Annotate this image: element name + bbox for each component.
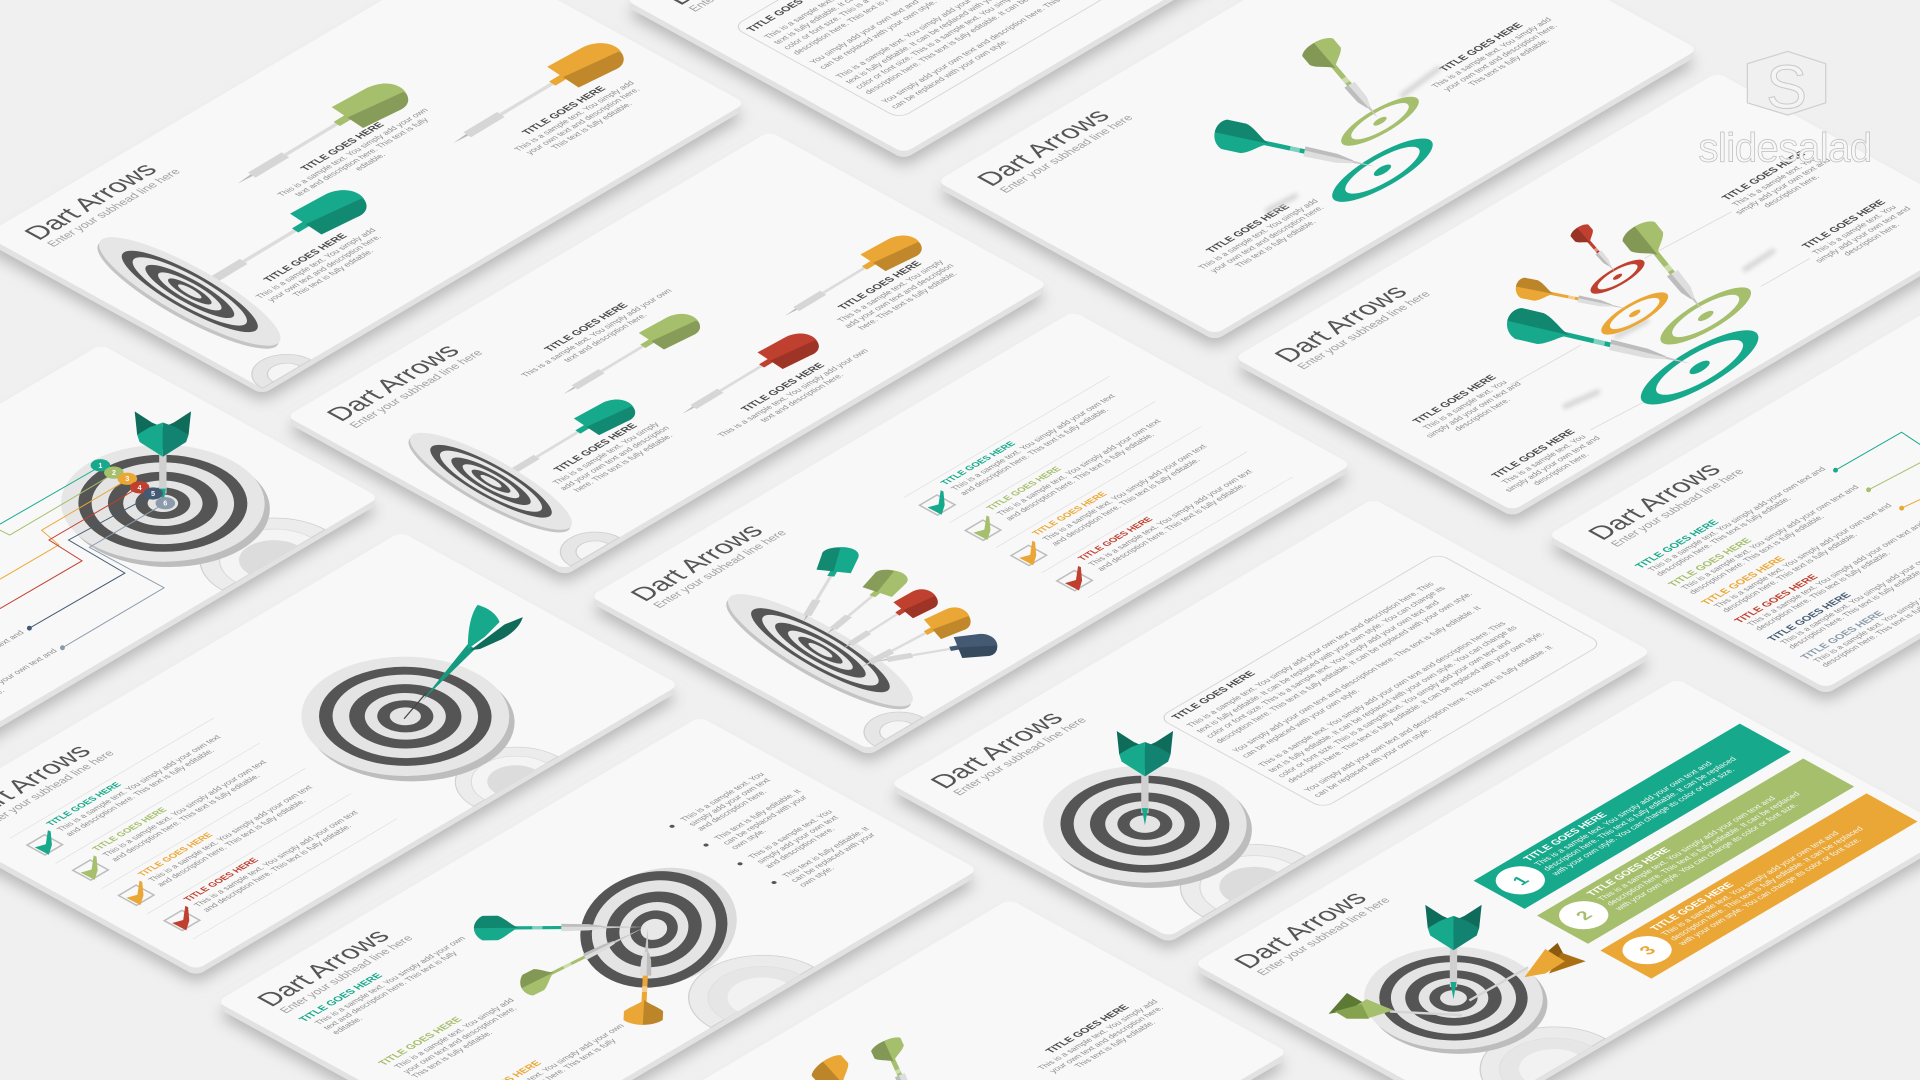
target [86, 220, 292, 366]
dart orange [623, 928, 667, 1025]
dart orange [437, 36, 634, 156]
dart teal [486, 394, 643, 490]
slide content text: TITLE GOES HERE [739, 362, 828, 413]
slide content text: Enter your subhead line here [277, 934, 416, 1015]
dart green [222, 76, 418, 196]
panel: slide lower-left, target with single dart and checklist [0, 532, 679, 983]
slide content text: This is a sample text. You simply add [254, 227, 378, 300]
ring teal [1641, 324, 1758, 411]
slide content text: simply add your own text [755, 814, 841, 865]
slide content text: and description here. This text is fully editable. [1095, 482, 1248, 572]
dart red [833, 584, 944, 659]
slide content text and bars: with your own style. You can change its color or font size. [1676, 837, 1864, 947]
target [17, 421, 314, 591]
panel: slide top-left, three flat darts [0, 0, 745, 402]
slide content text: TITLE GOES HERE [1204, 203, 1293, 255]
slide content text: TITLE GOES HERE [543, 302, 631, 353]
slide content text: text and description here. This text is fully [321, 950, 460, 1031]
slide content text [0, 0, 710, 388]
slide content text: TITLE GOES HERE [1799, 610, 1887, 661]
slide content text: TITLE GOES HERE [1633, 518, 1722, 570]
decorative stand [170, 501, 325, 590]
dart teal [180, 183, 377, 303]
slide content text [305, 155, 1019, 566]
slide content text: TITLE GOES HERE [1733, 573, 1821, 625]
connector lines [1836, 432, 1920, 508]
slide content text: and description here. This text is fully editable. [958, 407, 1111, 497]
dart teal [1117, 731, 1173, 825]
target [1325, 925, 1586, 1075]
slide content text: TITLE GOES HERE [1170, 670, 1259, 722]
slide content text: You simply add your own text and description here. This text is fully editable. It [1302, 644, 1555, 793]
dart red [1568, 222, 1624, 278]
slide content text: TITLE GOES HERE [984, 465, 1063, 512]
slide content text: and description here. [763, 826, 837, 869]
slide content text: This is a sample text. You simply add your own text and [1679, 484, 1861, 591]
slide content text: Dart Arrows [1268, 281, 1414, 366]
slide content text: editable. [353, 152, 388, 172]
slide content text: TITLE GOES HERE [377, 1016, 465, 1067]
slide content text: description here. This text is fully editable. [1720, 532, 1859, 614]
dart red [669, 327, 827, 424]
numbered circles: 2 [112, 468, 116, 477]
slide content text: TITLE GOES HERE [1800, 198, 1889, 250]
slide content text: TITLE GOES HERE [1490, 428, 1578, 480]
slide content text [1575, 428, 1920, 670]
slide content text: TITLE GOES HERE [297, 972, 386, 1024]
slide content text: your own text and description here. [1047, 1005, 1166, 1074]
slide content text: and description here. This text is fully editable. [109, 773, 262, 863]
panel: slide left, target with numbered lines [0, 344, 379, 796]
slide content text: This is a sample text. You simply add [1430, 16, 1554, 89]
slide content text: description here. [1452, 397, 1513, 432]
slide content text: This text is fully editable. It [712, 788, 804, 842]
slide content text: own style. [797, 865, 836, 888]
watermark logo [1698, 51, 1872, 171]
slide content text: and description here. This text is fully editable. [201, 823, 354, 913]
slide content text: description here. This text is fully editable. [1753, 550, 1892, 632]
panel: slide lower-right, three numbered bars [1194, 679, 1920, 1080]
dart shadows [1565, 251, 1773, 407]
dart orange [772, 229, 930, 326]
dart navy [872, 631, 1001, 674]
slide content text: This is a sample text. You [1730, 156, 1819, 208]
slide content text [0, 610, 558, 957]
slide content text: description here. This text is fully editable. It can be replaced with your own style. [1285, 630, 1547, 784]
slide content text: description here. This text is fully editable. It can be replaced with your own style. [1214, 591, 1475, 745]
slide content text: can be replaced with your [721, 794, 809, 846]
leader lines [1511, 212, 1810, 430]
check marks [928, 490, 1082, 590]
connector nodes [1833, 468, 1904, 511]
slide content text: This is a sample text. You simply add your own text and description here. This [1185, 581, 1436, 729]
target [256, 632, 560, 806]
numbered circles: 6 [163, 499, 167, 508]
slide content text: Dart Arrows [924, 707, 1070, 792]
slide content text: This is a sample text. You simply add your own text [949, 393, 1118, 492]
ring green [1660, 283, 1751, 349]
slide content text: description here. [1761, 174, 1822, 209]
slide content text: This is a sample text. You simply add your own text [995, 418, 1164, 517]
dart orange [852, 602, 977, 679]
slide content text: add your own text and description [842, 262, 956, 329]
dart orange [1514, 276, 1629, 319]
slide content text: This text is fully editable. [1466, 37, 1552, 87]
dart teal [1212, 118, 1378, 181]
slide content text: This text is fully editable. [1233, 219, 1318, 269]
slide content text: Enter your subhead line here [997, 113, 1136, 195]
slide content text: You simply add your own text and description here. This text is fully editable. It [1230, 605, 1484, 754]
slide content text: This text is fully editable. [549, 101, 634, 151]
ring orange [1601, 289, 1668, 338]
slide content text: Enter your subhead line here [1295, 289, 1434, 371]
slide content text: TITLE GOES HERE [1044, 1003, 1132, 1055]
slide content text and bars: Enter your subhead line here [1254, 896, 1393, 977]
slide content text: description here. This text is fully editable. [1654, 495, 1793, 577]
slide content text: Enter your subhead line here [347, 348, 486, 430]
slide content text: Dart Arrows [18, 159, 164, 244]
slide content text and bars: 1 [1508, 873, 1534, 888]
slide content text and bars: with your own style. You can change its color or font size. [1549, 767, 1737, 877]
slide content text: This is a sample text. You simply add [512, 80, 637, 153]
slide content text: This is a sample text. You simply add your own text [146, 784, 315, 883]
slide content text: This text is fully editable. It [780, 825, 872, 879]
slide content text: This is a sample text. You simply add your own text [1041, 443, 1209, 542]
slide content text: TITLE GOES HERE [1720, 150, 1809, 202]
slide content text: TITLE GOES HERE [1766, 591, 1854, 643]
slide content text: and description here. This text is fully editable. [1004, 432, 1157, 522]
slide content text and bars: description here. This text is fully editable. It can be replaced [1668, 825, 1866, 942]
slide content text: simply add your own text [687, 777, 773, 827]
slide content text: Enter your subhead line here [950, 716, 1090, 797]
target [569, 854, 748, 1001]
slide content text: This is a sample text. You simply add your own [276, 107, 431, 198]
target [399, 417, 582, 548]
dart teal [782, 545, 865, 624]
target [999, 741, 1296, 912]
slide content text: TITLE GOES HERE [1030, 490, 1109, 537]
slide content text: Dart Arrows [320, 340, 466, 425]
numbered circles: 3 [125, 474, 129, 483]
slide content text: TITLE GOES HERE [938, 440, 1018, 486]
dart green [551, 308, 708, 404]
slide content text: This is a sample text. You simply add your own text [101, 759, 269, 858]
connector nodes [27, 626, 65, 650]
slide content text: description here. [1531, 451, 1591, 487]
slide content text: can be replaced with your own style. [817, 0, 939, 71]
slide content text: can be replaced with your own style. [1312, 727, 1434, 799]
slide content text: text and description here. [562, 312, 649, 363]
target [715, 577, 924, 726]
slide content text: and description here. This text is fully editable. [63, 748, 217, 838]
slide content text and bars: TITLE GOES HERE [1522, 811, 1610, 863]
slide content text [970, 0, 1610, 298]
slide content text: your own text and description here. [524, 86, 642, 156]
ring green [1341, 93, 1419, 150]
slide content text and bars: TITLE GOES HERE [1649, 881, 1737, 933]
slide content text: and description here. This text is fully editable. [1049, 457, 1202, 547]
slide content text: own style. [729, 828, 768, 851]
panel: slide top, two darts on rings [937, 0, 1698, 348]
slide content text: Enter your subhead line here [44, 167, 184, 249]
slide content text: and description here. This text is fully editable. [155, 798, 308, 888]
dart orange [808, 1051, 896, 1080]
slide content text: TITLE GOES HERE [44, 781, 123, 827]
slide content text and bars [1227, 691, 1920, 1080]
slide content text: This is a sample text. You simply add your own text and description here. This [1257, 620, 1508, 768]
panel: slide right, four darts on rings [1234, 72, 1920, 524]
ring teal [1332, 133, 1433, 207]
slide content text: TITLE GOES HERE [1411, 374, 1500, 425]
slide content text: TITLE GOES HERE [1700, 555, 1788, 607]
slide content text: here. This text is fully editable. [856, 270, 959, 331]
slide content text: text is fully editable. It can be replaced with your own style. You can change its [1194, 585, 1447, 734]
slide content text and bars: description here. This text is fully editable. It can be replaced [1605, 790, 1802, 907]
slide content text: This is a sample text. You [1500, 433, 1588, 485]
dart teal [1504, 305, 1694, 379]
ring red [1591, 257, 1645, 297]
slide content text [924, 515, 1635, 924]
slide content text: TITLE GOES HERE [181, 856, 261, 903]
dart teal [474, 915, 645, 940]
slide content text [609, 341, 1312, 746]
slide content text: TITLE GOES HERE [299, 121, 387, 173]
slide content text: simply add your own text and [1503, 435, 1603, 493]
slide content text: can be replaced with your [789, 831, 878, 884]
panel: slide lower-centre, target and text box [890, 499, 1651, 950]
dart orange [1469, 943, 1586, 1000]
slide content text: This text is fully editable. [1073, 1019, 1158, 1069]
slide content text and bars: description here. This text is fully editable. It can be replaced [1541, 756, 1739, 872]
slide content text: TITLE GOES HERE [552, 422, 640, 474]
panel: slide bottom-left, three darts on large target [217, 717, 978, 1080]
dart green [869, 1034, 927, 1080]
slide content text: color or font size. This is a sample text. You simply add your own text and [1204, 599, 1442, 739]
slide content text: TITLE GOES HERE [1438, 21, 1526, 73]
numbered circles: 5 [151, 489, 155, 498]
slide content text: This is a sample text. You simply add your own text [192, 809, 361, 908]
numbered circles: 1 [98, 461, 102, 470]
slide content text: your own text and description here. [1208, 204, 1326, 274]
slide content text: TITLE GOES HERE [1667, 537, 1755, 589]
slide content text [250, 733, 962, 1080]
connector lines [0, 468, 164, 648]
slide content text: This is a sample text. You simply add your own text and [1646, 466, 1828, 573]
slide content text: TITLE GOES HERE [1076, 516, 1155, 562]
slide content text: color or font size. This is a sample text. You simply add your own text and [1276, 639, 1514, 779]
body text [0, 629, 68, 770]
slide content text and bars: This is a sample text. You simply add your own text and [1596, 795, 1778, 902]
numbered circles [91, 459, 175, 509]
slide content text: description here. [1842, 222, 1902, 257]
slide content text: TITLE GOES HERE [520, 85, 609, 137]
slide content text: your own text and description here. [266, 234, 384, 303]
dart shadows [1267, 69, 1439, 211]
slide content text [1261, 92, 1920, 498]
slide content text: This is a sample text. You simply add [392, 997, 517, 1070]
slide content text [1025, 992, 1178, 1080]
slide content text: simply add your own text and [1424, 380, 1524, 439]
slide content text: your own text and description here. [401, 1005, 519, 1075]
panel: slide centre, fan of five darts and checklist [590, 311, 1351, 763]
slide content text: simply add your own text and [1733, 157, 1833, 216]
watermark logo: S [1766, 53, 1807, 121]
slide content text: This is a sample text. You simply add [1196, 198, 1321, 271]
dart teal [135, 411, 191, 506]
slide content text and bars: This is a sample text. You simply add your own text and [1659, 830, 1841, 937]
slide content text: your own text and description here. [1441, 23, 1559, 92]
slide content text and bars: TITLE GOES HERE [1585, 846, 1674, 898]
slide content text: This is a sample text. You simply add [1036, 998, 1160, 1071]
slide content text and bars: with your own style. You can change its color or font size. [1612, 802, 1800, 912]
slide content text: This is a sample text. You simply add your own [313, 935, 468, 1026]
dart teal [1425, 905, 1482, 999]
panel: slide top-centre text box [626, 0, 1387, 167]
slide content text: This is a sample text. You simply [835, 258, 946, 324]
numbered circles: 4 [138, 483, 143, 492]
slide content text: Enter your subhead line here [1608, 467, 1747, 549]
slide content text: TITLE GOES HERE [90, 806, 169, 852]
slide content text: This text is fully editable. [291, 248, 376, 298]
slide content text: and description here. [695, 789, 769, 832]
slide content text: This is a sample text. You simply add your own [716, 347, 871, 438]
slide content text: text is fully editable. It can be replaced with your own style. You can change its [1266, 624, 1519, 774]
slide content text: Dart Arrows [1581, 459, 1727, 544]
slide content text: TITLE GOES HERE [262, 232, 350, 284]
panel: slide bottom-centre, partial [527, 899, 1288, 1080]
slide content text: This is a sample text. You [746, 808, 835, 860]
slide content text: This text is fully editable. [410, 1030, 495, 1079]
slide content text: text and description here. This text is fully [293, 116, 431, 198]
slide content text: Dart Arrows [624, 520, 770, 605]
dart green [1619, 217, 1718, 319]
slide content text and bars: Dart Arrows [1227, 887, 1373, 972]
slide content text: description here. This text is fully editable. [1687, 514, 1826, 596]
slide content text: TITLE GOES HERE [136, 831, 215, 878]
slide content text: This is a sample text. You simply add your own [519, 287, 674, 378]
slide content text: add your own text and description [558, 425, 672, 492]
slide content text: This is a sample text. You [678, 771, 767, 823]
watermark logo: slidesalad [1698, 125, 1872, 171]
dart diagonal [404, 605, 523, 719]
slide content text: simply add your own text and [1813, 205, 1913, 264]
slide content text: text and description here. [758, 372, 846, 423]
slide content text: can be replaced with your own style. [889, 38, 1011, 110]
slide content text: This is a sample text. You [1810, 204, 1899, 256]
slide content text: This is a sample text. You [1421, 379, 1510, 431]
slide content text [659, 0, 1179, 123]
slide content text and bars: 3 [1634, 943, 1661, 958]
dart green [516, 917, 651, 999]
slide content text and bars: 2 [1571, 908, 1597, 923]
slide content text: editable. [330, 1016, 365, 1036]
slide content text: This is a sample text. You simply [551, 421, 662, 486]
dart green [1329, 993, 1462, 1019]
slide content text: This is a sample text. You simply add your own text [1086, 468, 1255, 567]
dart green [1298, 34, 1393, 126]
panel: slide mid-left, side target with two dart pairs [287, 131, 1048, 583]
slide content text: Dart Arrows [250, 925, 396, 1010]
slide content text: Dart Arrows [970, 105, 1116, 190]
check marks [35, 830, 189, 930]
slide content text and bars: This is a sample text. You simply add your own text and [1533, 760, 1715, 867]
panel: slide right, six item list [1548, 250, 1920, 702]
dart green [809, 566, 916, 639]
slide content text: here. This text is fully editable. [572, 433, 675, 493]
slide content text: Enter your subhead line here [650, 528, 790, 610]
slide content text: This is a sample text. You simply add your own text [55, 733, 224, 833]
slide content text: This is a sample text. You simply add your own text and [1712, 502, 1894, 609]
slide content text: can be replaced with your own style. [1240, 687, 1362, 759]
slide content text: TITLE GOES HERE [836, 260, 925, 312]
